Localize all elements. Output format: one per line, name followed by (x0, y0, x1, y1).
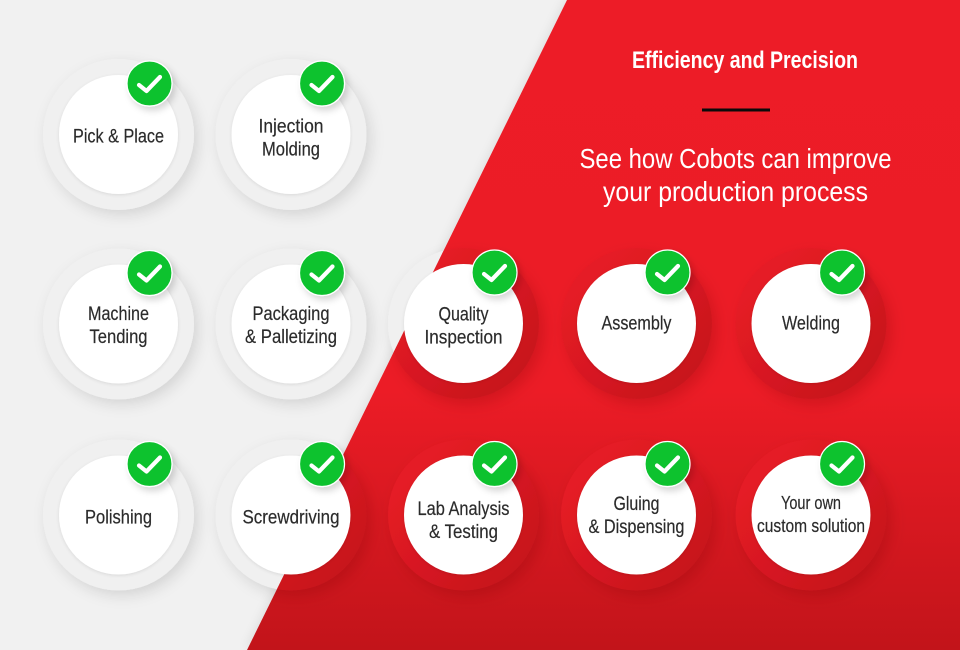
subtitle: See how Cobots can improve (580, 143, 892, 174)
item: Gluing & Dispensing: Gluing (614, 494, 660, 515)
heading divider (702, 108, 770, 112)
item: Your own custom solution: custom solution (757, 516, 865, 536)
item: Machine Tending: Machine (88, 304, 149, 325)
background: red diagonal panel (247, 0, 960, 650)
background: diagonal edge shadow (249, 1, 566, 645)
item: Gluing & Dispensing: & Dispensing (588, 517, 684, 538)
subtitle (580, 143, 892, 207)
item: Lab Analysis & Testing: & Testing (429, 522, 498, 543)
heading: Efficiency and Precision (632, 47, 858, 74)
item: Gluing & Dispensing (561, 440, 712, 590)
item: Quality Inspection: Inspection (424, 328, 502, 348)
item: Packaging & Palletizing: & Palletizing (245, 327, 337, 348)
item: Welding: Welding (782, 314, 840, 334)
item: Lab Analysis & Testing: Lab Analysis (418, 499, 510, 520)
item: Screwdriving (216, 440, 366, 590)
item: Packaging & Palletizing (216, 248, 366, 400)
item: Packaging & Palletizing: Packaging (252, 304, 330, 325)
item: Quality Inspection (388, 248, 539, 399)
item: Machine Tending (43, 248, 194, 400)
item: Machine Tending: Tending (90, 327, 148, 348)
item: Your own custom solution: Your own (781, 493, 841, 513)
item: Injection Molding (216, 59, 366, 210)
item: Polishing (43, 440, 194, 590)
item: Pick & Place: Pick & Place (73, 126, 164, 148)
item: Screwdriving: Screwdriving (242, 508, 340, 528)
item: Quality Inspection: Quality (438, 304, 489, 326)
item: Injection Molding: Molding (262, 140, 320, 160)
item: Welding (736, 248, 886, 399)
subtitle: your production process (603, 176, 868, 207)
item: Assembly: Assembly (602, 314, 672, 334)
item: Injection Molding: Injection (258, 116, 324, 138)
item: Pick & Place (43, 59, 194, 210)
item: Your own custom solution (736, 440, 886, 590)
item: Assembly (561, 248, 712, 399)
item: Polishing: Polishing (85, 508, 152, 528)
item: Lab Analysis & Testing (388, 440, 539, 590)
